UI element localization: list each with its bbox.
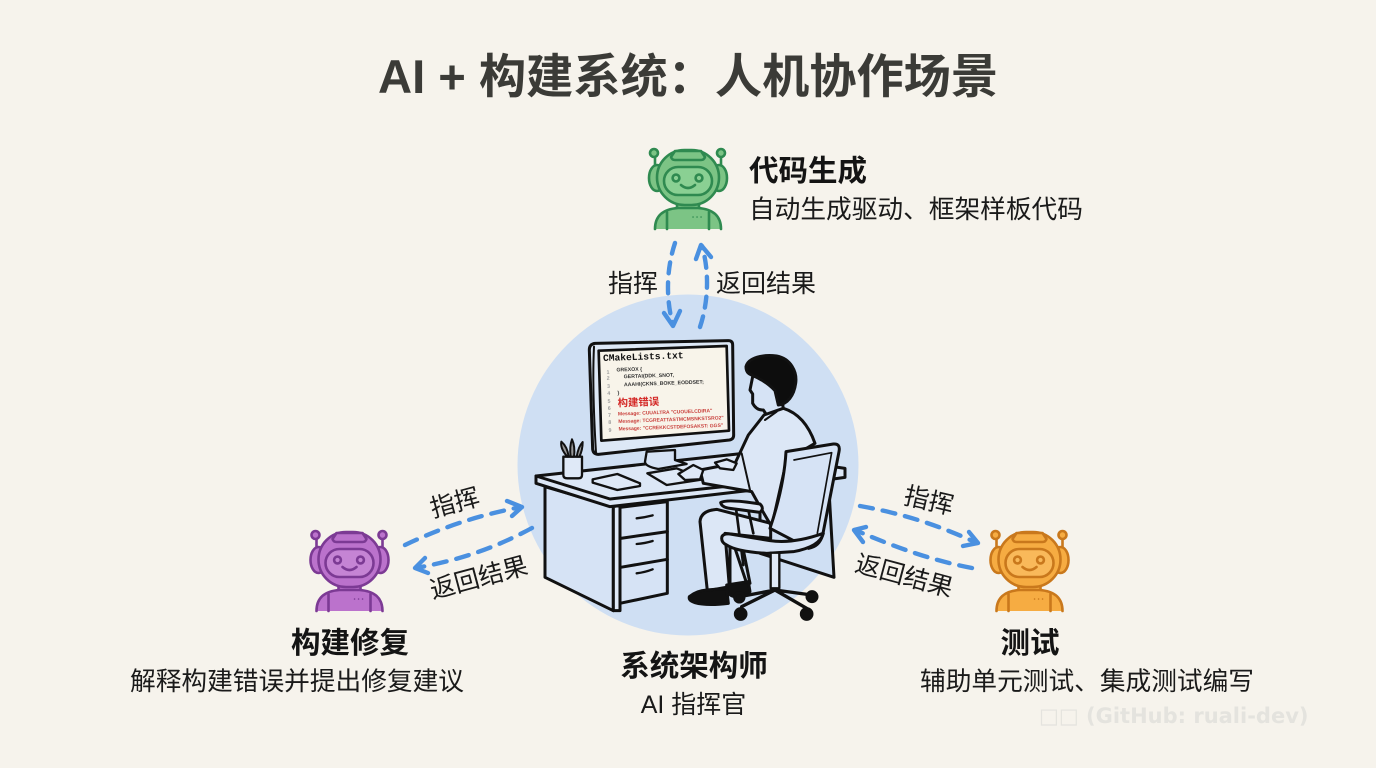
arrow: top result — [696, 245, 711, 327]
label: top result: 返回结果 — [716, 270, 816, 298]
robot: code generation — [649, 149, 727, 229]
label: right command: 指挥 — [901, 482, 956, 520]
code lines: 9 — [608, 428, 612, 434]
error lines: Message: CUUALTRA "CUOUELCDIRA" — [618, 408, 713, 418]
code lines: GREXOX { — [616, 367, 642, 374]
text block: code generation — [749, 155, 1083, 224]
code lines: 5 — [607, 399, 611, 405]
text block: code generation: 自动生成驱动、框架样板代码 — [749, 195, 1083, 224]
text block: build repair — [130, 627, 464, 696]
label: right result: 返回结果 — [852, 550, 956, 603]
code lines: 6 — [608, 406, 611, 412]
code lines: 2 — [607, 376, 610, 382]
error lines: Message: TCGREATTASTMCMSNKSTSRO2" — [618, 415, 724, 425]
arrow: right result — [854, 527, 972, 568]
code lines: 7 — [608, 413, 611, 419]
text block: system architect: 系统架构师 — [620, 650, 768, 683]
monitor screen content — [603, 349, 725, 434]
text block: build repair: 解释构建错误并提出修复建议 — [130, 667, 464, 696]
office chair — [721, 444, 839, 619]
code lines: GERTAI(DDK_SNOT, — [624, 373, 675, 380]
code lines: 4 — [607, 391, 610, 397]
arrow: left command — [405, 501, 522, 545]
illustration: architect at desk — [536, 341, 845, 619]
arrow: right command — [860, 506, 978, 546]
monitor — [589, 341, 734, 469]
error lines — [618, 408, 725, 432]
desk — [536, 453, 845, 611]
keyboard — [647, 468, 703, 485]
title: AI + 构建系统：人机协作场景 — [378, 51, 998, 104]
person — [678, 356, 815, 605]
robot: build repair — [310, 531, 388, 611]
code lines: } — [617, 390, 619, 397]
text block: testing: 辅助单元测试、集成测试编写 — [920, 667, 1254, 696]
book — [593, 474, 640, 490]
code lines — [606, 364, 706, 434]
text block: system architect — [620, 650, 768, 719]
robot: testing — [990, 531, 1068, 611]
arrow: left result — [415, 528, 532, 573]
text block: system architect: AI 指挥官 — [641, 691, 746, 719]
pen cup — [561, 439, 583, 478]
label: top command: 指挥 — [608, 270, 658, 298]
error heading: 构建错误 — [617, 395, 660, 410]
text block: testing: 测试 — [1000, 627, 1060, 660]
watermark: □□ (GitHub: ruali-dev) — [1039, 704, 1308, 728]
label: left command: 指挥 — [427, 483, 483, 523]
arrow: top command — [664, 243, 680, 326]
code lines: 3 — [607, 384, 610, 390]
text block: testing — [920, 627, 1254, 696]
code file name: CMakeLists.txt — [603, 350, 684, 364]
text block: code generation: 代码生成 — [749, 155, 867, 188]
text block: build repair: 构建修复 — [291, 627, 409, 660]
code lines: 1 — [606, 370, 610, 376]
code lines: AAAHI(CKNS_BOKE_EODDSET; — [624, 379, 704, 388]
code lines: 8 — [608, 420, 611, 426]
central blue circle — [518, 294, 858, 636]
error lines: Message: "CCREKKCSTDEFOSAKST: GGS" — [618, 423, 724, 433]
label: left result: 返回结果 — [427, 552, 531, 605]
